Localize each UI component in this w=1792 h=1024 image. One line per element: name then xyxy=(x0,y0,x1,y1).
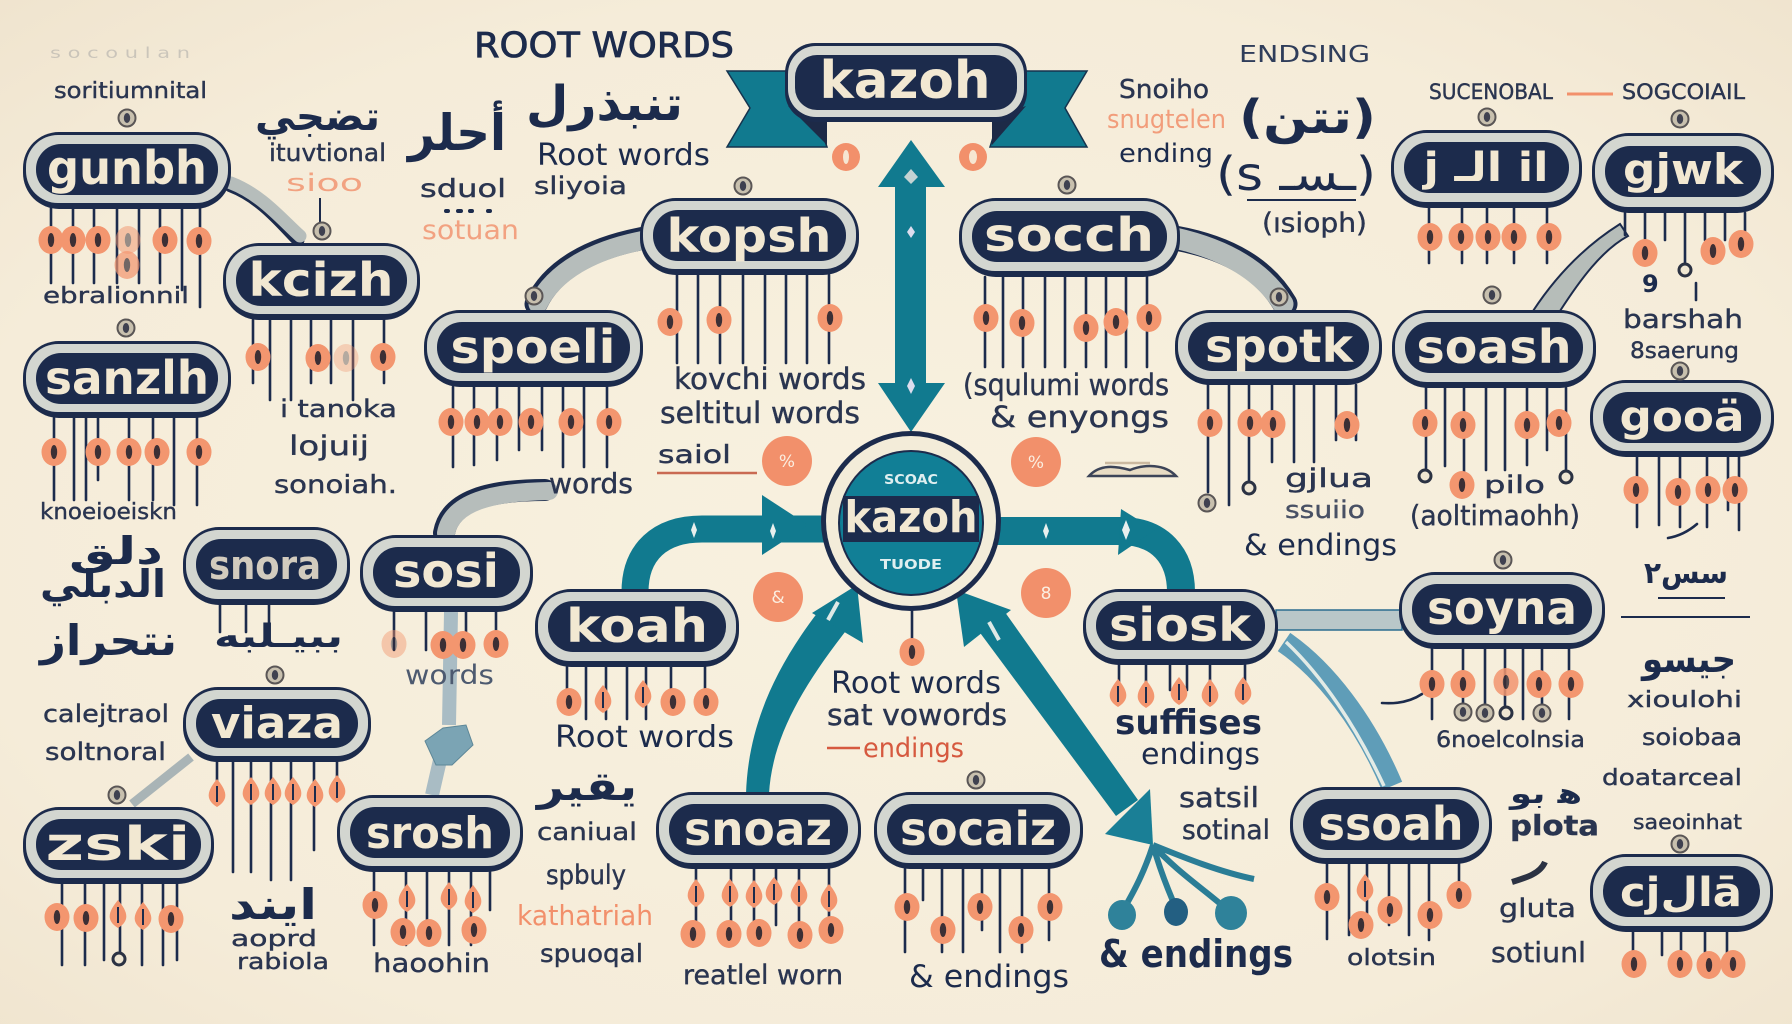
text block: lower left arabic column: نتحراز xyxy=(38,616,177,666)
text block: right column arabic: جيسو xyxy=(1640,637,1736,681)
connector: sosi to words and srosh xyxy=(425,490,549,795)
node: gjwk xyxy=(1592,110,1774,300)
text block: lower left arabic column: soltnoral xyxy=(45,738,166,766)
text block: centre left column: يقير xyxy=(535,764,637,810)
badges under the banner xyxy=(832,143,987,171)
arrow: lower left up to centre xyxy=(746,585,863,794)
centre hub: kazoh: kazoh xyxy=(844,492,978,543)
pin: kopsh xyxy=(734,178,752,194)
connector: siosk to soyna xyxy=(1276,610,1402,630)
text block: plota group: plota xyxy=(1510,809,1599,842)
text block: snoaz caption: reatlel worn xyxy=(683,960,843,991)
text block: upper right labels: SOGCOIAIL xyxy=(1622,80,1745,104)
text block: centre left column: spuoqal xyxy=(540,939,643,968)
text block: centre caption: endings xyxy=(863,733,964,764)
text block: words label: words xyxy=(405,660,494,691)
text block: arabic root words: sliyoia xyxy=(534,172,627,200)
text block: plota group: ﻫ بو xyxy=(1507,777,1582,810)
text block: plota group xyxy=(1491,777,1599,969)
text block: under sski: aoprd xyxy=(231,927,317,952)
text block: arabic root words: ituvtional xyxy=(269,139,386,167)
text block: below kcizh: lojuij xyxy=(289,431,369,462)
text block: ending labels: Snoiho xyxy=(1119,75,1209,105)
connector: viaza to sski xyxy=(108,757,191,804)
node: kcizh: kcizh xyxy=(248,253,394,307)
text block: upper right labels: barshah xyxy=(1623,305,1743,335)
text block: centre caption xyxy=(827,666,1007,764)
text block: ending labels xyxy=(1107,75,1376,239)
text block: centre left column: spbuly xyxy=(546,860,626,891)
text block: suffixes: sotinal xyxy=(1182,815,1270,846)
text block: soyna caption: 6noelcolnsia xyxy=(1436,728,1585,753)
node: cjala: cjالā xyxy=(1620,870,1742,916)
node: snoaz xyxy=(656,792,861,949)
text block: plota group: gluta xyxy=(1499,894,1576,924)
node: snoaz: snoaz xyxy=(684,802,832,856)
text block: under snora: ببيـلبه xyxy=(214,617,343,655)
node: jdul xyxy=(1391,108,1582,263)
text block: suffixes: endings xyxy=(1141,737,1260,771)
text block: arabic root words xyxy=(255,76,710,246)
text block: socch caption: (squlumi words xyxy=(963,368,1169,402)
text block: right column arabic xyxy=(1602,556,1750,834)
badges round the hub xyxy=(753,436,1071,622)
node: snora: snora xyxy=(209,543,321,589)
node: sski xyxy=(23,807,214,965)
text block: below kopsh: kovchi words xyxy=(674,362,866,396)
text block: arabic root words: sioo xyxy=(286,169,363,197)
node: snora xyxy=(183,527,350,632)
node: ssoah: ssoah xyxy=(1318,797,1464,851)
text block: arabic root words: sotuan xyxy=(422,215,519,246)
ribbon xyxy=(727,71,1087,147)
node: soyna xyxy=(1382,552,1605,722)
centre hub: kazoh xyxy=(821,431,1001,666)
node: socaiz xyxy=(874,772,1083,952)
node: sosi: sosi xyxy=(393,544,499,598)
text block: upper left labels: soritiumnital xyxy=(54,79,207,104)
node: srosh: srosh xyxy=(366,808,494,859)
text block: centre caption: Root words xyxy=(831,666,1001,701)
arrow: lower right from centre with branches xyxy=(956,590,1254,930)
text block: right column arabic: xioulohi xyxy=(1627,688,1742,713)
text block: centre left column xyxy=(517,764,653,968)
centre hub: kazoh: TUODE xyxy=(880,558,942,573)
node: gunbh: gunbh xyxy=(47,141,207,195)
node: viaza: viaza xyxy=(211,698,343,749)
text block: upper right labels: SUCENOBAL xyxy=(1429,80,1553,104)
node: viaza xyxy=(183,687,371,880)
connector: kopsh to spoei xyxy=(526,238,645,304)
text block: srosh caption: haoohin xyxy=(373,949,490,979)
text block: socch caption xyxy=(963,368,1169,434)
node: siosk xyxy=(1083,589,1278,708)
glyph: stray nine: 9 xyxy=(1642,270,1659,298)
text block: below kcizh: sonoiah. xyxy=(274,470,397,499)
arrow: vertical teal double arrow xyxy=(878,140,945,432)
text block: ending labels: ending xyxy=(1119,139,1213,169)
node: koah: koah xyxy=(566,599,708,653)
icon: small book xyxy=(1089,463,1176,476)
node: spotk xyxy=(1175,310,1382,512)
text block: centre left column: kathatriah xyxy=(517,899,653,932)
text block: below spotk: & endings xyxy=(1244,528,1397,562)
text block: under sski xyxy=(229,880,329,975)
node: gooa: gooä xyxy=(1620,392,1744,441)
text block: ending labels: (ısioph) xyxy=(1262,208,1367,239)
text block: plota group: sotiunl xyxy=(1491,936,1586,969)
node: jdul: j الـ il xyxy=(1421,145,1548,191)
node: spoei: spoeli xyxy=(450,320,616,374)
text block: below kcizh: i tanoka xyxy=(280,395,397,423)
text block: endings bottom: & endings xyxy=(909,959,1069,995)
badges round the hub: 8 xyxy=(1041,584,1051,604)
text block: arabic root words: أحلر xyxy=(405,100,506,163)
text block: ending labels: (تتن) xyxy=(1239,90,1376,144)
text block: centre caption: sat vowords xyxy=(827,698,1007,732)
text block: koah caption: Root words xyxy=(555,720,734,755)
node: gooa xyxy=(1590,362,1774,538)
text block: below spotk xyxy=(1244,464,1397,562)
node: koah xyxy=(535,589,739,719)
text block: arabic root words: تنبذرل xyxy=(526,76,683,132)
text block: right column arabic: doatarceal xyxy=(1602,766,1742,791)
text block: ending labels: (s ـسـ) xyxy=(1216,147,1376,201)
text block: below spotk: gjlua xyxy=(1285,464,1373,494)
text block: under sski: ايند xyxy=(229,880,317,929)
text block: ssoah caption: olotsin xyxy=(1347,946,1436,971)
text block: lower left arabic column: calejtraol xyxy=(43,700,169,728)
node: srosh xyxy=(337,795,523,947)
title banner: kazoh xyxy=(727,43,1087,147)
text block: below kopsh: seltitul words xyxy=(660,396,860,430)
text block: upper left labels: ebralionnil xyxy=(43,284,189,309)
node: spotk: spotk xyxy=(1205,319,1354,373)
node: soash: soash xyxy=(1416,320,1572,374)
text block: right column arabic: ﺳﺲ٢ xyxy=(1644,556,1728,591)
node: soyna: soyna xyxy=(1427,581,1577,635)
text block: below soash: (aoltimaohh) xyxy=(1410,499,1580,532)
arrow: right arch from centre xyxy=(995,509,1181,592)
text block: suffixes xyxy=(1115,703,1270,846)
text block: endings bottom large: & endings xyxy=(1099,932,1293,976)
text block: lower left arabic column: الدبلي xyxy=(40,562,166,606)
heading: endings: ENDSING xyxy=(1239,42,1370,68)
node: sanzlh xyxy=(23,320,231,505)
node: socch xyxy=(959,176,1180,367)
text block: upper right labels xyxy=(1429,80,1745,364)
node: kopsh: kopsh xyxy=(666,209,832,263)
text block: below soash: pilo xyxy=(1484,471,1545,499)
node: socch: socch xyxy=(984,208,1154,262)
connector: soash to gjwk xyxy=(1484,224,1628,311)
text block: arabic root words: Root words xyxy=(537,138,710,173)
text block: arabic root words: تضجي xyxy=(255,94,380,140)
text block: upper left labels xyxy=(40,44,207,525)
text block: arabic root words: sduol xyxy=(420,174,506,203)
text block: below kcizh xyxy=(274,395,397,499)
text block: below spotk: ssuiio xyxy=(1285,496,1365,524)
node: gjwk: gjwk xyxy=(1623,145,1744,194)
text block: under sski: rabiola xyxy=(237,950,329,975)
text block: socch caption: & enyongs xyxy=(990,400,1169,434)
text block: lower left arabic column xyxy=(38,529,177,766)
plate xyxy=(785,43,1027,122)
node: gunbh xyxy=(23,132,231,307)
text block: upper right labels: 8saerung xyxy=(1630,339,1739,364)
node: spoei xyxy=(424,310,643,467)
node: kcizh xyxy=(223,243,420,400)
badges round the hub: % xyxy=(1028,453,1044,473)
text block: below soash xyxy=(1410,471,1580,532)
text block: lower left arabic column: دلق xyxy=(69,529,163,573)
plate: kazoh xyxy=(820,51,990,111)
text block: under snora xyxy=(214,617,343,684)
text block: upper left labels: knoeioeiskn xyxy=(40,500,177,525)
text block: right column arabic: saeoinhat xyxy=(1633,810,1742,834)
node: siosk: siosk xyxy=(1109,598,1252,652)
node: ssoah xyxy=(1290,787,1492,940)
text block: below kopsh xyxy=(549,362,866,500)
node: socaiz: socaiz xyxy=(900,802,1056,856)
text block: suffixes: satsil xyxy=(1179,781,1259,814)
text block: below kopsh: saiol xyxy=(658,440,731,469)
node: cjala xyxy=(1590,836,1773,979)
text block: below kopsh: words xyxy=(549,467,633,500)
node: sosi xyxy=(360,535,533,659)
text block: centre left column: caniual xyxy=(537,818,637,846)
arrow: left arch to centre xyxy=(635,495,830,592)
node: sanzlh: sanzlh xyxy=(45,351,209,405)
badges round the hub: & xyxy=(771,588,785,608)
heading: root words: ROOT WORDS xyxy=(474,26,734,66)
node: soash xyxy=(1392,310,1596,499)
text block: ending labels: snugtelen xyxy=(1107,105,1226,135)
node: sski: zski xyxy=(46,817,190,871)
badges round the hub: % xyxy=(779,452,795,472)
text block: suffixes: suffises xyxy=(1115,703,1262,743)
connector: siosk to ssoah xyxy=(1284,642,1392,786)
centre hub: kazoh: SCOAC xyxy=(884,473,938,488)
connector: socch to spotk xyxy=(1175,238,1288,306)
text block: right column arabic: soiobaa xyxy=(1642,725,1742,751)
text block: upper left labels: s o c o u l a n xyxy=(50,44,190,62)
node: kopsh xyxy=(640,198,859,363)
connector: gunbh to kcizh xyxy=(231,183,330,240)
